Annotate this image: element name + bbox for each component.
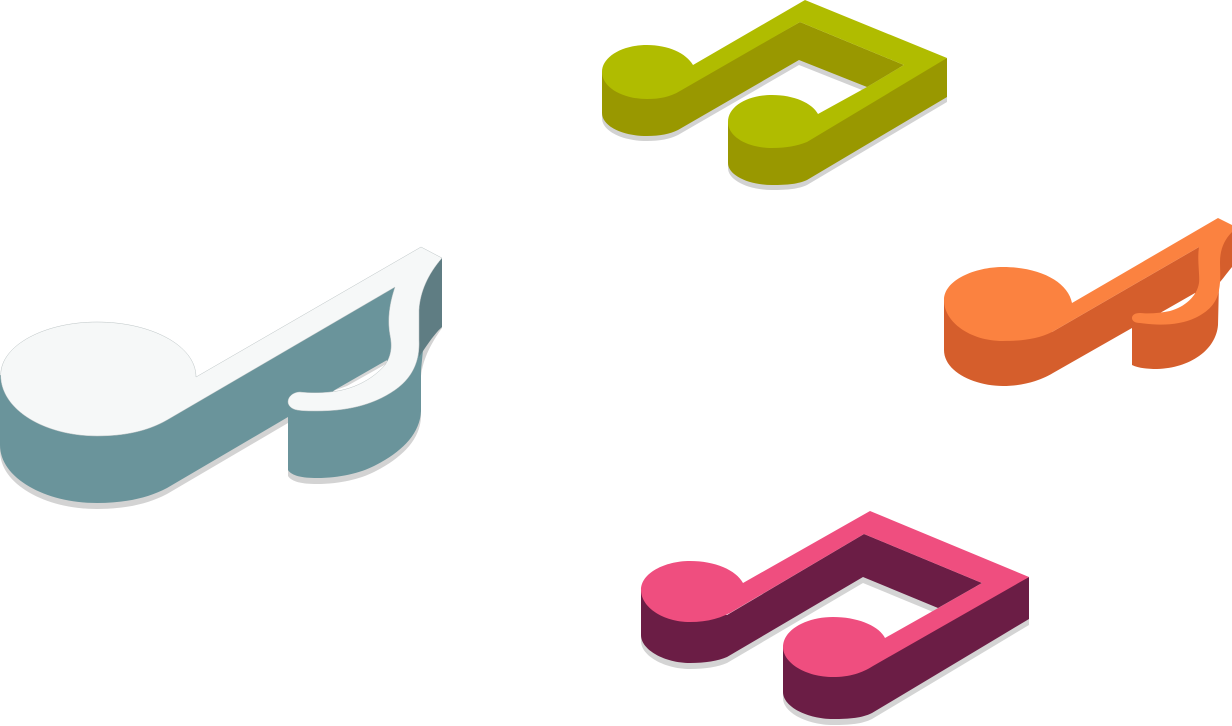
icon: teal and white single music note	[0, 247, 442, 509]
icon: olive green double music note	[602, 0, 947, 190]
flag side	[419, 258, 442, 357]
gap under the flag	[330, 361, 395, 398]
gap under the flag	[1160, 293, 1200, 318]
icon: pink and maroon double music note	[641, 511, 1029, 725]
icon: orange single music note	[944, 218, 1232, 386]
